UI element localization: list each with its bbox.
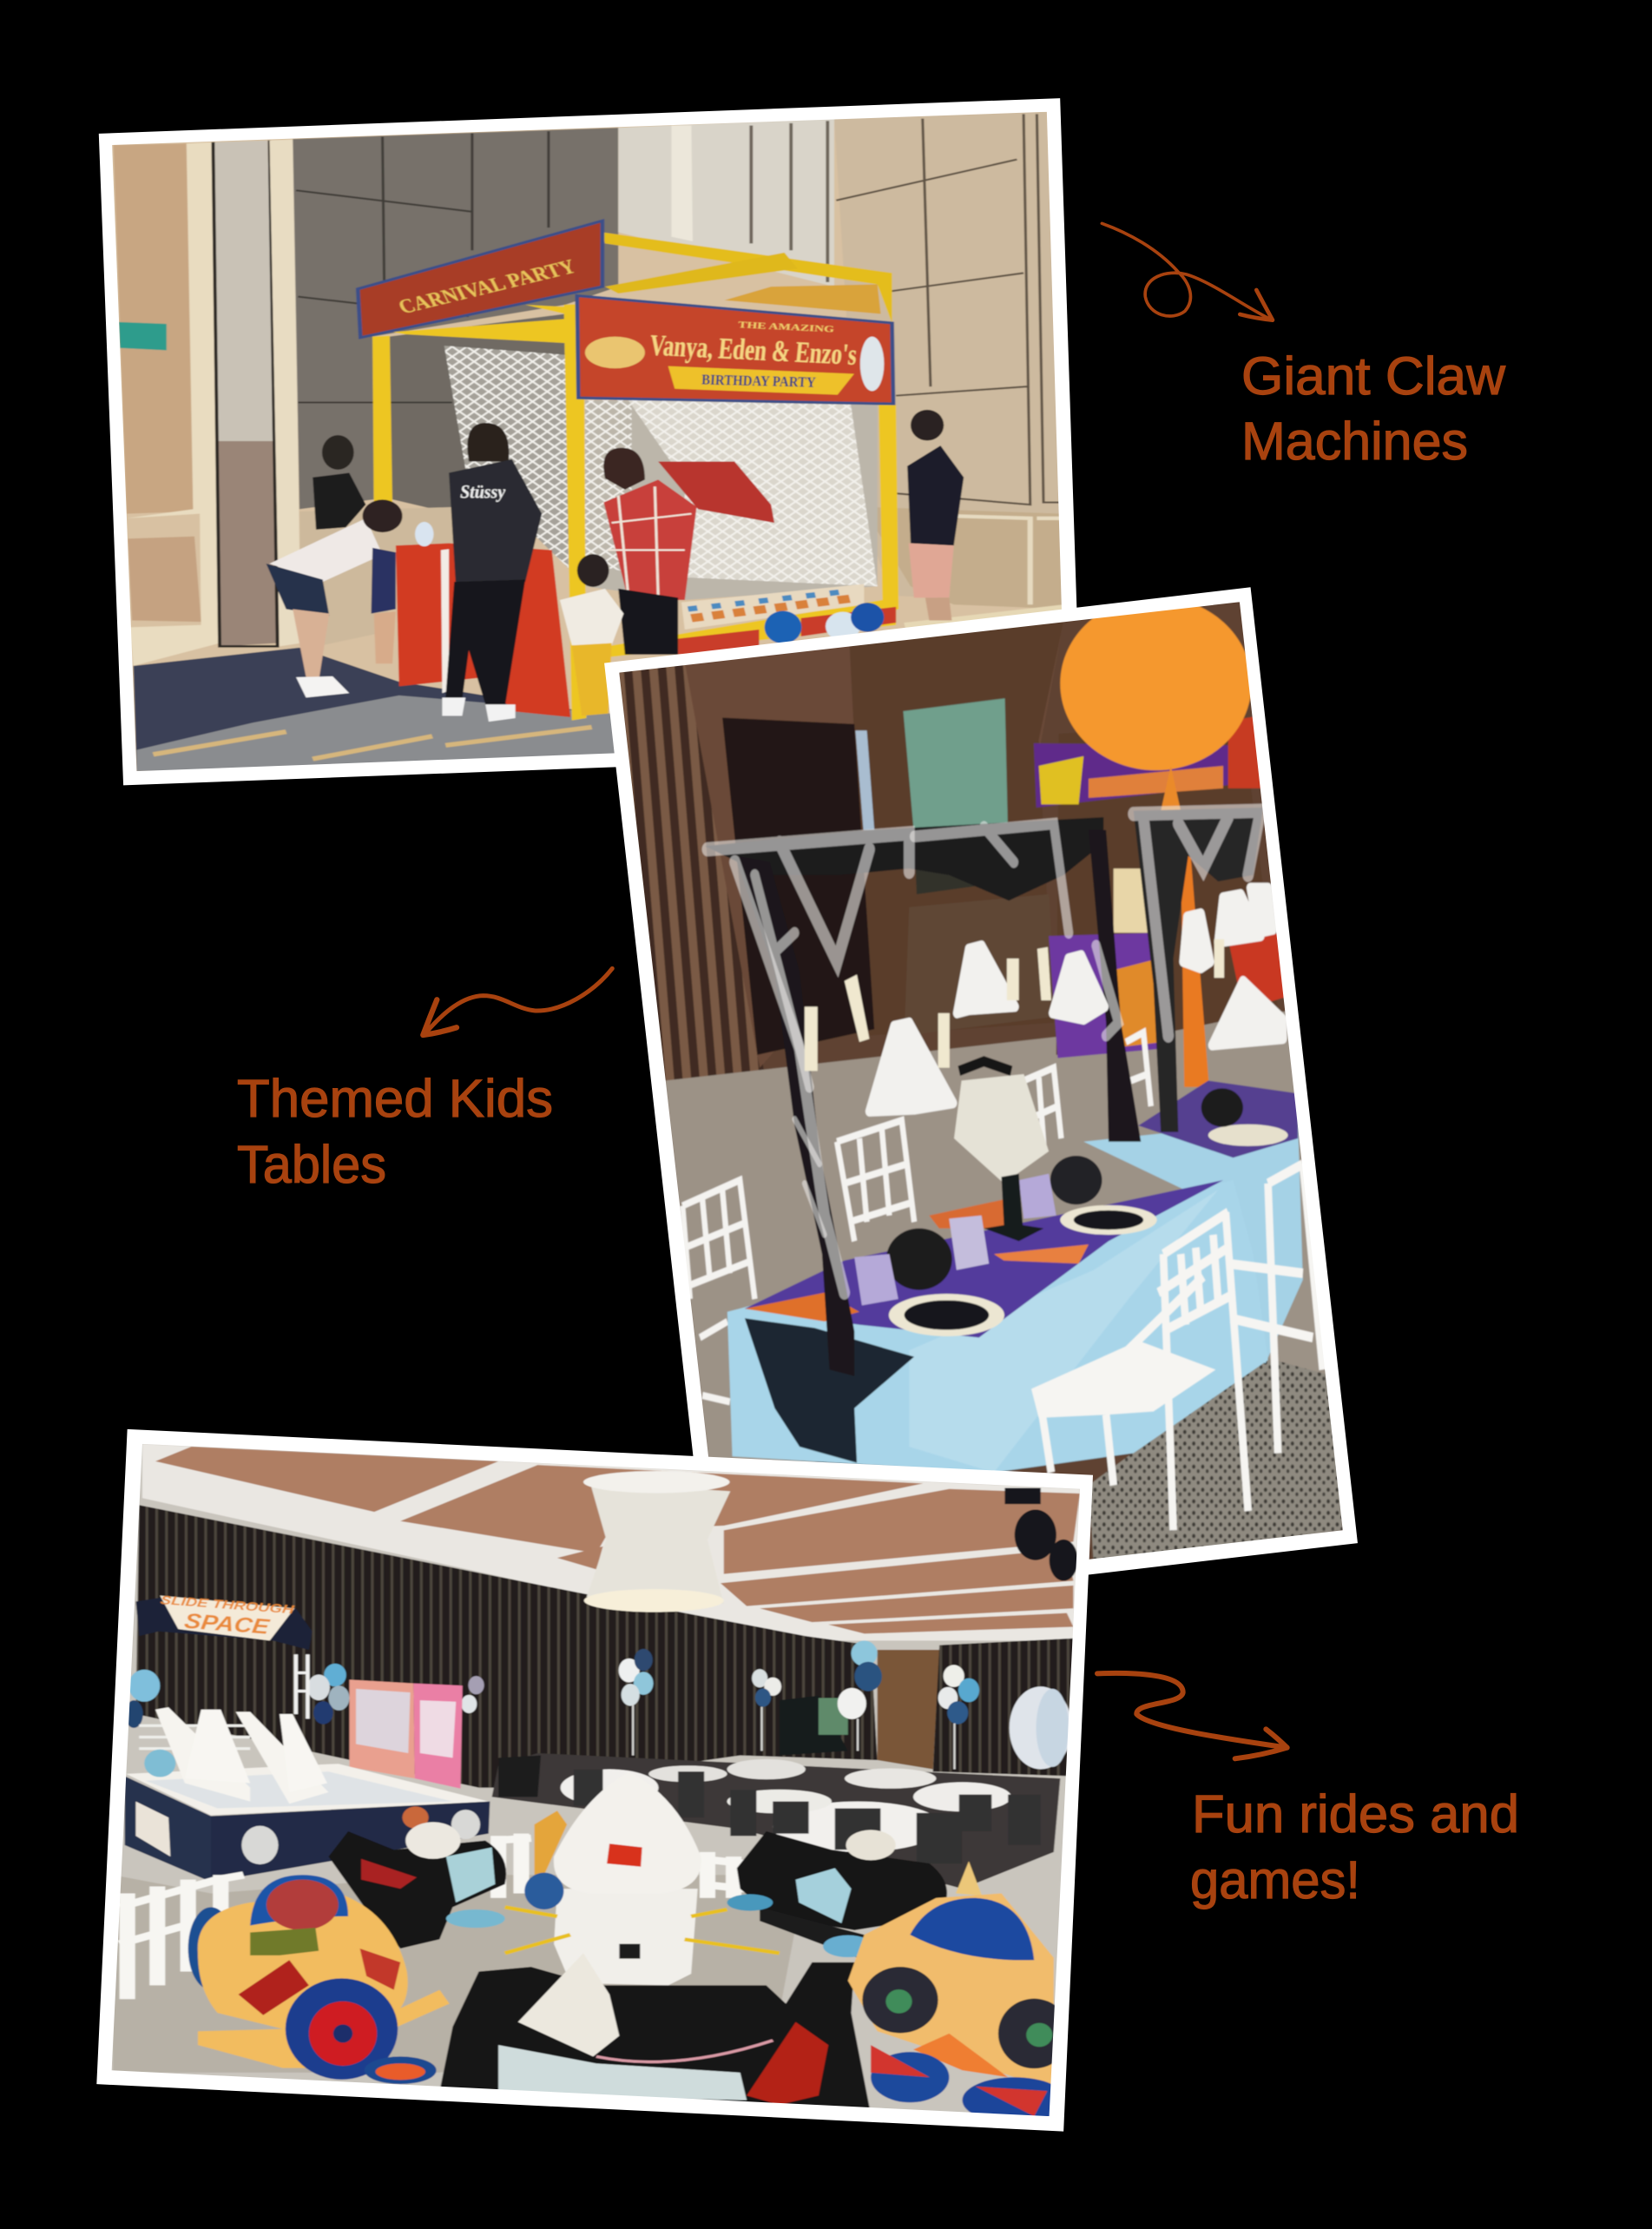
speckled carpet [1089, 1357, 1343, 1562]
plates [889, 1294, 1004, 1336]
caption: themed kids tables: Themed Kids [237, 1069, 553, 1128]
claw machine structure: Vanya, Eden & Enzo's [648, 328, 859, 372]
table runner [745, 1180, 1223, 1337]
far banquet tables [492, 1753, 1060, 1889]
main table cloth [727, 1180, 1268, 1473]
sandy ride floor [113, 1875, 806, 2073]
caption: fun rides and games: Fun rides and [1192, 1784, 1519, 1843]
caption: themed kids tables: Tables [237, 1135, 386, 1194]
ceiling [142, 1444, 1080, 1640]
second table [1083, 1119, 1303, 1363]
cauldrons [886, 1229, 952, 1290]
white picket fence [120, 1834, 767, 1999]
arrow: looping arrow to giant claw machines [1102, 223, 1273, 320]
panel: themed kids tables photo [604, 587, 1358, 1575]
balloons [125, 1640, 1072, 1770]
slide through space sign [135, 1593, 313, 1718]
photo scene [619, 602, 1343, 1560]
hanging ghosts [869, 888, 1283, 1111]
panel: fun rides and games photo [87, 1415, 1111, 2136]
glasses [854, 1254, 898, 1305]
pendant lamp [583, 1471, 730, 1612]
names banner [577, 296, 893, 404]
photo scene [112, 111, 1062, 771]
centerpiece tree [954, 1074, 1049, 1184]
stage lights [1004, 1488, 1078, 1581]
arrow: zigzag arrow to fun rides and games [1097, 1673, 1287, 1758]
floor [665, 1010, 1343, 1473]
photo frame [96, 1429, 1093, 2132]
photo frame [99, 98, 1082, 785]
front black rocket ride [439, 1953, 871, 2114]
arrow: wavy arrow to themed kids tables [423, 968, 612, 1035]
claw machine structure: CARNIVAL PARTY [395, 256, 580, 319]
photo scene [111, 1444, 1080, 2117]
claw machine structure: THE AMAZING [738, 320, 835, 334]
ball pit with slides [125, 1707, 490, 1882]
slide through space sign: SLIDE THROUGH [160, 1593, 295, 1617]
centre rocket [505, 1771, 780, 1985]
red control cabinet [396, 544, 570, 717]
photo frame [604, 587, 1358, 1619]
back chairs [682, 1032, 1151, 1401]
claw machine structure [358, 221, 898, 721]
right yellow duck plane ride [848, 1861, 1070, 2123]
arch of black cloth and webs [705, 808, 1263, 1376]
panel: giant claw machine photo [87, 87, 1129, 799]
caption: giant claw machines: Machines [1241, 412, 1468, 471]
floating candles [805, 940, 1224, 1071]
back of room arcade [1056, 803, 1224, 1056]
caption: giant claw machines: Giant Claw [1241, 346, 1506, 406]
orange balloon [1060, 597, 1252, 770]
people: Stüssy [460, 480, 506, 503]
rear rides [328, 1810, 947, 1958]
caption: fun rides and games: games! [1190, 1850, 1360, 1909]
floor and carpet [134, 648, 612, 771]
left orange plane ride [188, 1875, 450, 2084]
slide through space sign: SPACE [183, 1610, 272, 1639]
claw machine cabinets [350, 1679, 463, 1789]
claw machine structure: BIRTHDAY PARTY [701, 371, 816, 391]
front chair [1031, 1164, 1323, 1530]
carnival party banner [358, 221, 602, 338]
dark slatted walls [135, 1505, 878, 1788]
spider web lace [745, 1318, 914, 1463]
people [267, 410, 964, 722]
